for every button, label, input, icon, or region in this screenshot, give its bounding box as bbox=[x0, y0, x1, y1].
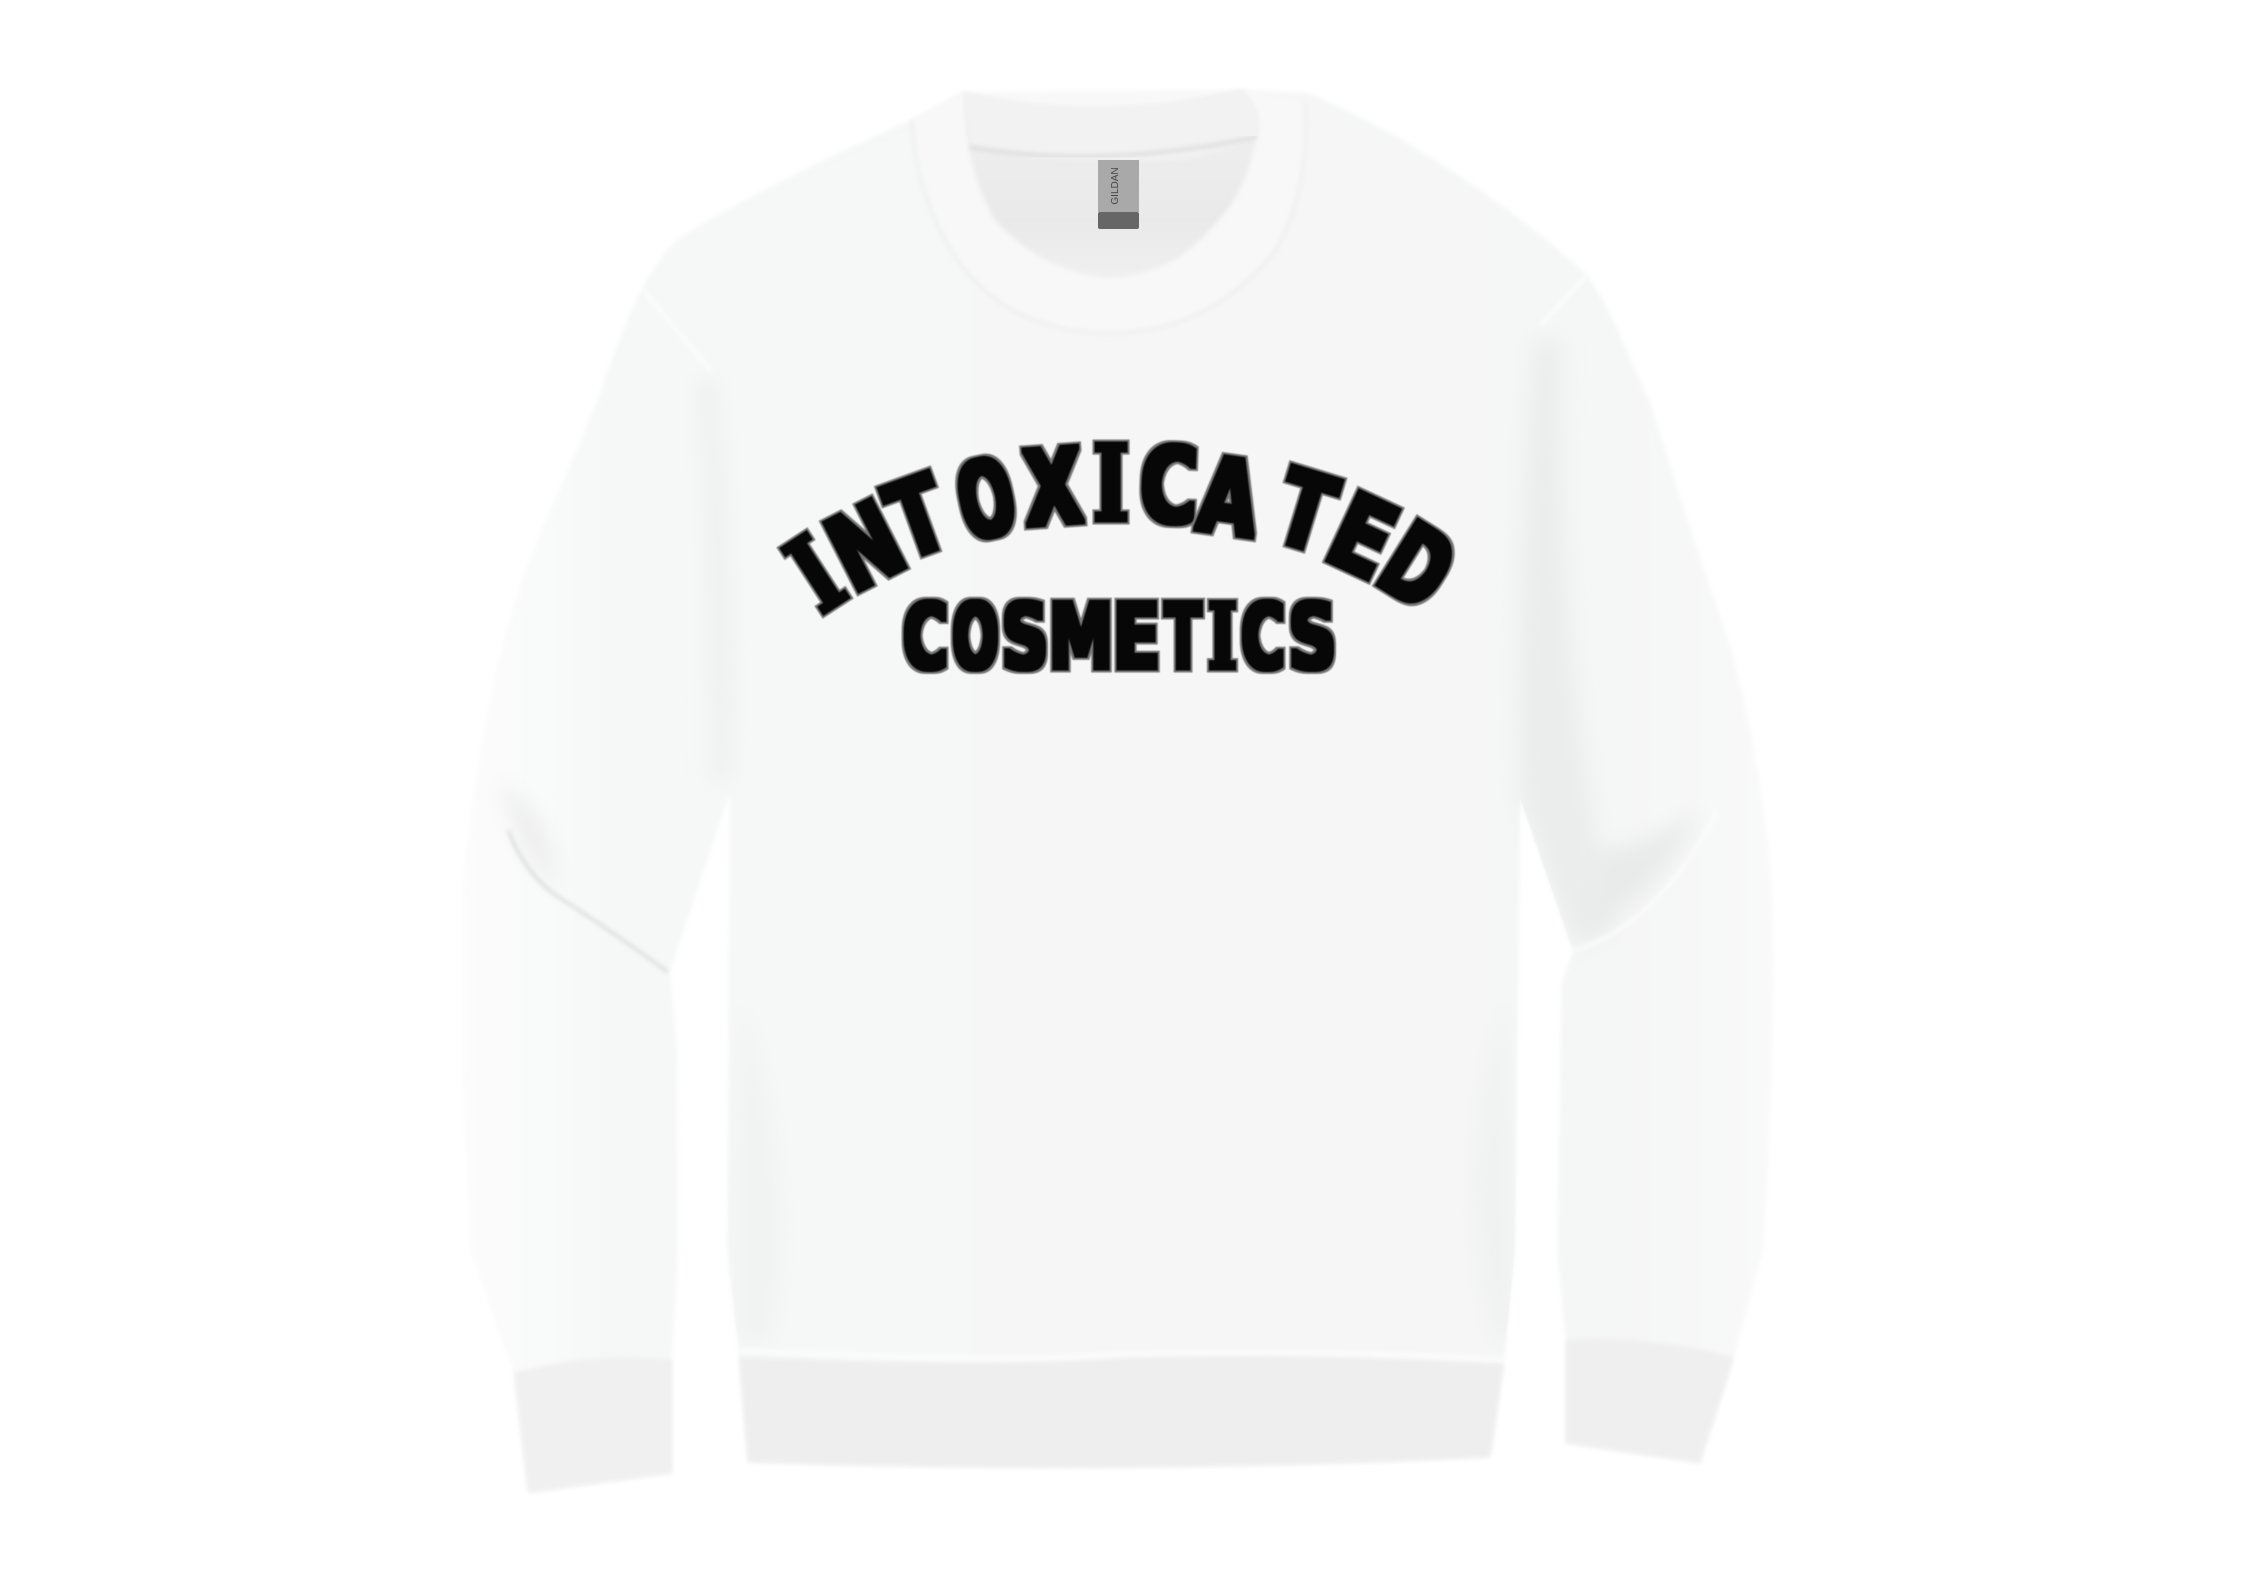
right cuff bbox=[1566, 1339, 1734, 1463]
back collar band bbox=[964, 90, 1258, 161]
bottom ribbed hem bbox=[739, 1356, 1504, 1467]
print: INTOXICATED arched wordmark: C bbox=[1138, 424, 1200, 548]
garment silhouette bbox=[502, 94, 1719, 1356]
print: INTOXICATED arched wordmark: T bbox=[872, 452, 963, 584]
print: COSMETICS wordmark bbox=[903, 583, 1336, 690]
neck opening bbox=[964, 90, 1258, 278]
sleeve crease right bbox=[1573, 811, 1717, 951]
print: INTOXICATED arched wordmark: E bbox=[1310, 471, 1414, 605]
print: INTOXICATED arched wordmark: O bbox=[947, 437, 1026, 566]
tag brand text: GILDAN bbox=[1110, 167, 1121, 205]
print: COSMETICS wordmark: T bbox=[1165, 586, 1201, 690]
print: INTOXICATED arched wordmark: I bbox=[1093, 424, 1129, 545]
print: COSMETICS wordmark: S bbox=[1289, 585, 1336, 690]
hem seam bbox=[739, 1350, 1504, 1360]
print: INTOXICATED arched wordmark: T bbox=[1262, 446, 1348, 578]
sweatshirt illustration bbox=[502, 89, 1734, 1493]
print: COSMETICS wordmark: I bbox=[1209, 583, 1236, 689]
shoulder seam left bbox=[643, 290, 712, 372]
back collar seam bbox=[970, 137, 1257, 156]
print: INTOXICATED arched wordmark bbox=[769, 424, 1474, 636]
print: COSMETICS wordmark: E bbox=[1113, 585, 1160, 690]
print: COSMETICS wordmark: S bbox=[1002, 585, 1048, 690]
sleeve crease left bbox=[508, 830, 668, 972]
neck tag bbox=[1098, 160, 1139, 229]
shoulder seam right bbox=[1540, 275, 1587, 326]
left cuff bbox=[514, 1357, 672, 1493]
print: INTOXICATED arched wordmark: X bbox=[1020, 427, 1086, 551]
print: INTOXICATED arched wordmark: A bbox=[1192, 435, 1266, 563]
print: COSMETICS wordmark: M bbox=[1049, 585, 1113, 690]
print: COSMETICS wordmark: C bbox=[1241, 584, 1285, 689]
print: INTOXICATED arched wordmark: I bbox=[769, 514, 864, 636]
print: INTOXICATED arched wordmark: N bbox=[809, 478, 923, 616]
print: COSMETICS wordmark: O bbox=[953, 584, 998, 690]
print: COSMETICS wordmark: C bbox=[903, 586, 948, 690]
print: INTOXICATED arched wordmark: D bbox=[1359, 501, 1474, 635]
collar ribbing bbox=[912, 90, 1306, 333]
sleeve and armhole shading bbox=[514, 364, 1678, 934]
